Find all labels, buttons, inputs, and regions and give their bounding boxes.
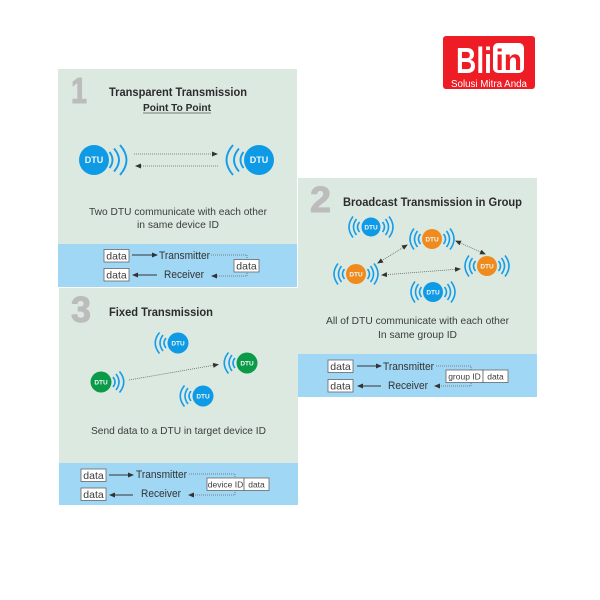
icon: DTU blue top: DTU: [364, 224, 378, 231]
icon: DTU blue top: [155, 332, 188, 354]
description: [89, 206, 267, 231]
icon: DTU green target: DTU: [240, 360, 254, 367]
flow diagram 2: group ID: [448, 372, 481, 382]
flow diagram 2: Transmitter: [383, 361, 434, 373]
arrow: left to right: [134, 153, 217, 155]
flow diagram 2: data: [487, 372, 504, 382]
number 1: 1: [71, 70, 87, 111]
description: in same device ID: [137, 219, 219, 231]
icon: DTU right: [226, 145, 274, 175]
flow diagram 3: data: [83, 470, 104, 482]
flow diagram 3: Receiver: [141, 488, 181, 500]
flow diagram 1: [104, 250, 259, 282]
description: Two DTU communicate with each other: [89, 206, 267, 218]
icon: DTU blue bottom: DTU: [426, 289, 440, 296]
icon: DTU blue top: [349, 216, 393, 238]
description: [326, 315, 509, 341]
flow diagram 1: data: [106, 250, 127, 262]
icon: DTU blue bottom: DTU: [196, 393, 210, 400]
icon: DTU blue bottom: [180, 386, 214, 406]
icon: DTU orange right: [465, 256, 509, 276]
flow diagram 2: data: [330, 361, 351, 373]
panel 3: fixed transmission: [59, 288, 298, 505]
heading: transparent transmission: Transparent Transmission: [109, 85, 247, 99]
arrows: group links: [378, 241, 485, 275]
icon: DTU green source: [90, 372, 124, 392]
description: Send data to a DTU in target device ID: [91, 425, 266, 437]
description: In same group ID: [378, 329, 457, 341]
flow diagram 3: data: [248, 480, 265, 490]
icon: DTU left: [79, 145, 126, 175]
heading: fixed transmission: Fixed Transmission: [109, 305, 213, 319]
flow diagram 3: data: [83, 489, 104, 501]
logo: Bliin: [443, 36, 535, 90]
icon: DTU left: DTU: [85, 155, 103, 165]
panel 1: transparent transmission: [58, 69, 297, 287]
flow diagram 2: [328, 360, 508, 392]
flow diagram 3: device ID: [208, 480, 243, 490]
icon: DTU orange left: DTU: [349, 271, 363, 278]
flow diagram 1: Receiver: [164, 269, 204, 281]
arrow: source to target: [129, 364, 218, 380]
flow diagram 2: Receiver: [388, 380, 428, 392]
number 2: 2: [310, 179, 331, 220]
logo: Bliin: Solusi Mitra Anda: [451, 79, 527, 90]
icon: DTU orange top: DTU: [425, 236, 439, 243]
heading: broadcast transmission: Broadcast Transmission in Group: [343, 195, 522, 209]
panel 2: broadcast transmission: [298, 178, 537, 397]
icon: DTU orange right: DTU: [480, 263, 494, 270]
icon: DTU blue top: DTU: [171, 340, 185, 347]
subheading: point to point: Point To Point: [143, 102, 211, 114]
flow diagram 1: data: [236, 260, 257, 272]
flow diagram 1: data: [106, 270, 127, 282]
flow diagram 3: Transmitter: [136, 469, 187, 481]
icon: DTU blue bottom: [411, 282, 455, 302]
icon: DTU right: DTU: [250, 155, 268, 165]
icon: DTU orange top: [410, 228, 454, 250]
flow diagram 2: data: [330, 380, 351, 392]
arrow: right to left: [136, 165, 218, 167]
description: All of DTU communicate with each other: [326, 315, 509, 327]
number 3: 3: [71, 289, 91, 330]
icon: DTU orange left: [334, 264, 378, 284]
icon: DTU green source: DTU: [94, 379, 108, 386]
logo: Bliin: in: [496, 44, 522, 77]
logo: Bliin: Bli: [456, 40, 492, 81]
icon: DTU green target: [224, 352, 258, 374]
flow diagram 1: Transmitter: [159, 250, 210, 262]
flow diagram 3: [81, 469, 269, 501]
